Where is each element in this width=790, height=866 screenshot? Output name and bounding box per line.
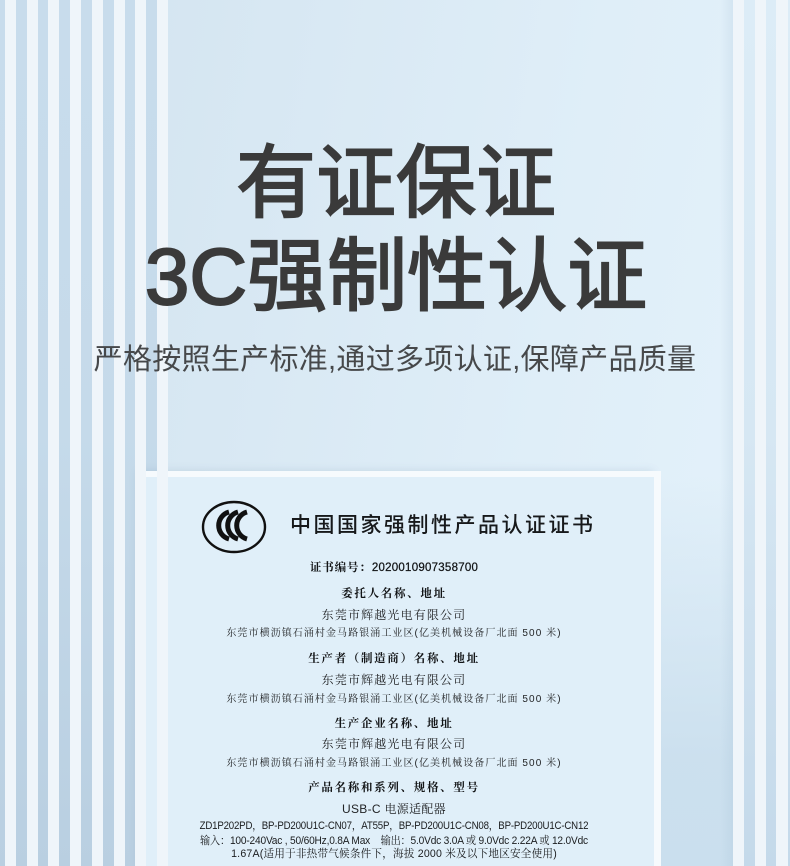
section: client: 委托人名称、地址 — [341, 588, 447, 600]
shadow beside right stripes — [720, 0, 733, 866]
client address: 东莞市横沥镇石涌村金马路银涌工业区(亿美机械设备厂北面 500 米) — [226, 628, 562, 639]
certificate — [146, 469, 661, 866]
factory address: 东莞市横沥镇石涌村金马路银涌工业区(亿美机械设备厂北面 500 米) — [226, 758, 562, 769]
certificate heading: 中国国家强制性产品认证证书 — [290, 514, 596, 537]
title: 3C强制性认证 — [145, 232, 647, 321]
title — [145, 139, 647, 321]
model numbers: ZD1P202PD，BP-PD200U1C-CN07，AT55P，BP-PD200U1C-CN08，BP-PD200U1C-CN12 — [200, 820, 588, 832]
right stripes background — [733, 0, 790, 866]
certificate number: 证书编号：2020010907358700 — [310, 562, 478, 574]
section: manufacturer: 生产者（制造商）名称、地址 — [308, 653, 480, 665]
section: factory: 生产企业名称、地址 — [335, 718, 453, 730]
icon: CCC logo — [202, 500, 266, 554]
left stripes — [5, 0, 168, 866]
title: 有证保证 — [236, 139, 556, 228]
usage conditions: 1.67A(适用于非热带气候条件下，海拔 2000 米及以下地区安全使用) — [231, 848, 557, 860]
input and output ratings: 输入：100-240Vac , 50/60Hz,0.8A Max 输出：5.0Vdc 3.0A 或 9.0Vdc 2.22A 或 12.0Vdc — [200, 835, 588, 847]
client company: 东莞市辉越光电有限公司 — [322, 608, 466, 622]
left stripes background — [0, 0, 168, 866]
right stripes — [733, 0, 788, 866]
section: product: 产品名称和系列、规格、型号 — [308, 782, 480, 794]
certificate frame — [146, 471, 661, 866]
subtitle: 严格按照生产标准,通过多项认证,保障产品质量 — [94, 344, 696, 376]
certificate text block — [200, 561, 588, 860]
manufacturer company: 东莞市辉越光电有限公司 — [322, 673, 466, 687]
product name: USB-C 电源适配器 — [342, 802, 446, 816]
factory company: 东莞市辉越光电有限公司 — [322, 737, 466, 751]
manufacturer address: 东莞市横沥镇石涌村金马路银涌工业区(亿美机械设备厂北面 500 米) — [226, 694, 562, 705]
